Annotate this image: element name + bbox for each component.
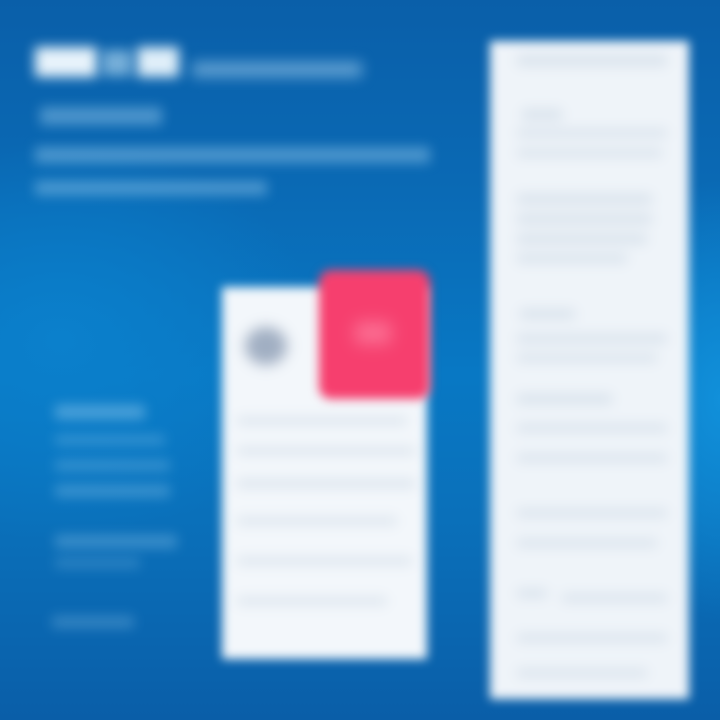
panel: right white column [490, 41, 689, 699]
right column text lines [519, 53, 665, 678]
panel: pink callout [319, 270, 430, 399]
intro text block [29, 100, 436, 202]
left column text [49, 398, 181, 633]
icon: grey circle [245, 327, 287, 365]
icon: callout glyph [355, 322, 391, 344]
panel: centre white card [222, 287, 427, 659]
title [25, 37, 369, 87]
card text lines [240, 416, 412, 606]
